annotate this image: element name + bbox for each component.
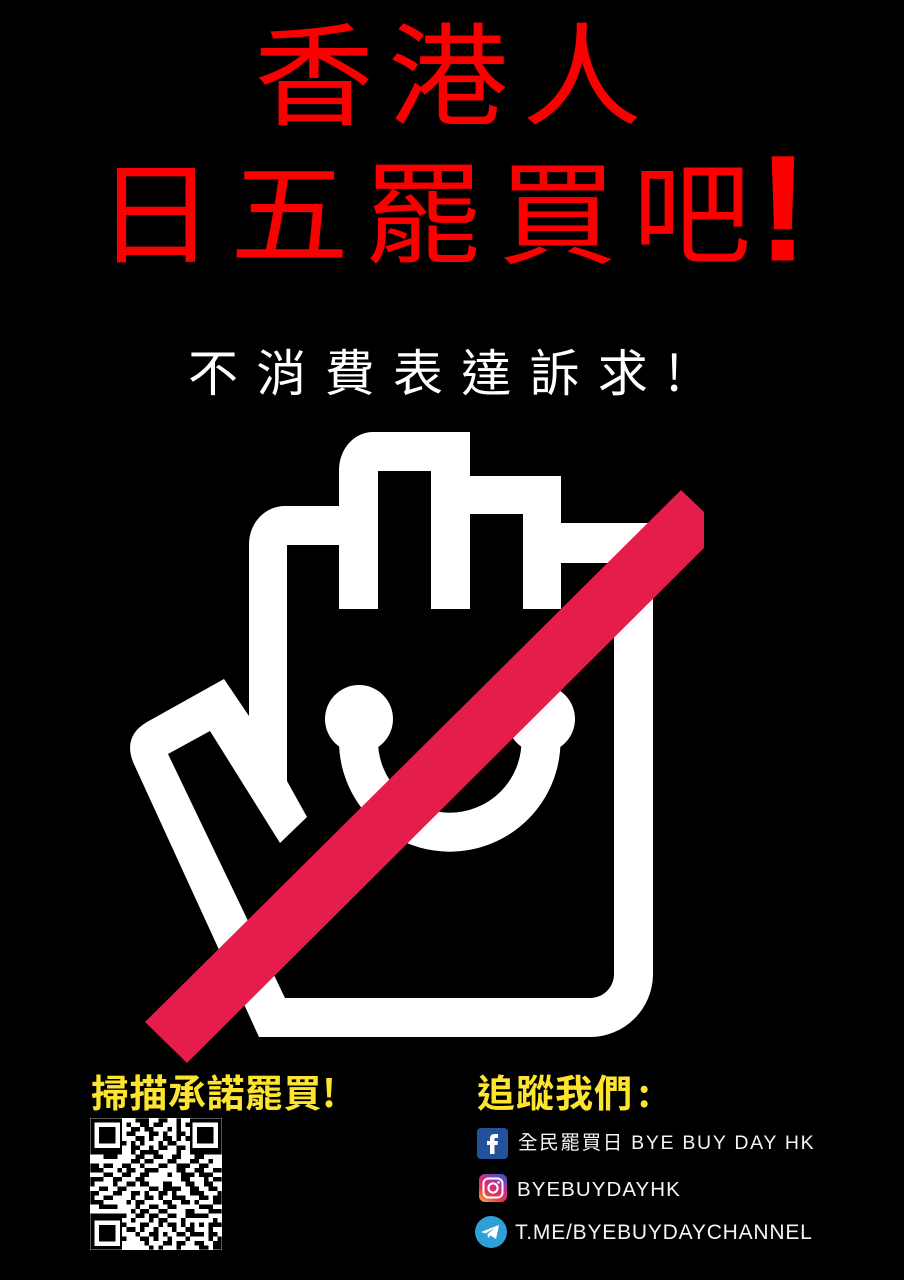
hand outline (130, 432, 653, 1037)
icon: telegram (475, 1216, 507, 1248)
icon: facebook (477, 1128, 508, 1159)
QR code (90, 1118, 222, 1250)
text: instagram handle: BYEBUYDAYHK (517, 1178, 681, 1201)
heading: scan to pledge: 掃描承諾罷買! (91, 1063, 337, 1118)
smile (325, 685, 575, 832)
subtitle: 不消費表達訴求! (188, 334, 701, 406)
icon: instagram (479, 1174, 507, 1202)
title (96, 0, 808, 292)
prohibition slash (145, 490, 704, 1063)
title line 2: 日五罷買吧 (96, 126, 766, 287)
title exclamation mark: ! (758, 124, 808, 292)
text: telegram channel: T.ME/BYEBUYDAYCHANNEL (515, 1221, 813, 1244)
text: facebook name: 全民罷買日 BYE BUY DAY HK (518, 1132, 815, 1154)
heading: follow us: 追蹤我們: (477, 1063, 651, 1118)
